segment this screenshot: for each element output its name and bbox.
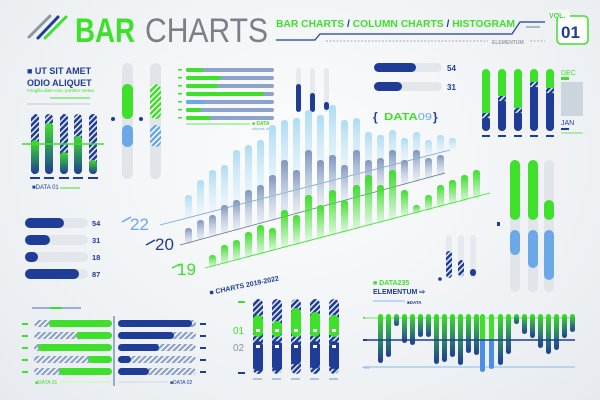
volume badge: VOL. <box>549 13 565 20</box>
bars <box>363 317 575 319</box>
subtitle <box>276 18 545 46</box>
panel: 54/31 bars <box>374 63 456 92</box>
panel: horizontal bar list <box>178 68 274 131</box>
panel: top-right stacked columns <box>482 69 583 137</box>
panel: horizontal bar list: ■ DATA <box>252 121 270 127</box>
header: title <box>29 12 268 50</box>
panel: horizontal bar list: ultrices data <box>252 126 274 131</box>
heading: ■ DATA235 <box>373 280 409 287</box>
front series 2019 <box>209 170 480 267</box>
chart: main 3D column chart 2019-2022 <box>122 105 490 297</box>
panel: 54/31/18/87 bars <box>25 218 101 279</box>
panel: twin vertical tracks <box>111 63 161 179</box>
panel: 54/31/18/87 bars: 18 <box>92 253 100 262</box>
label: DATA09: DATA 09 <box>384 112 433 123</box>
header: title: CHARTS <box>145 12 268 50</box>
panel: bottom-center stacked columns: 01 <box>233 326 245 337</box>
label: DATA09 <box>373 110 438 124</box>
mid series 2020 <box>185 150 444 244</box>
heading: ■ UT SIT AMET <box>27 66 92 76</box>
chart caption: ■ CHARTS 2019-2022 <box>209 275 280 297</box>
back series 2022 <box>185 105 456 219</box>
panel: bottom-left dual bars: ■DATA 02 <box>170 380 193 386</box>
year labels: 22 <box>130 215 149 234</box>
panel: histogram DATA235: ELEMENTUM ⇨ <box>373 289 425 296</box>
panel: top-left column chart: ODIO ALIQUET <box>27 78 92 88</box>
panel: bottom-left dual bars: ■DATA 01 <box>35 380 58 386</box>
panel: histogram DATA235 <box>362 280 575 372</box>
volume badge: 01 <box>561 23 580 42</box>
legend: ■DATA 01 <box>32 185 59 191</box>
panel: 54/31/18/87 bars: 54 <box>92 219 101 228</box>
panel: bottom-center stacked columns <box>233 299 339 380</box>
panel: right vertical tracks <box>497 160 554 292</box>
label: DATA09: } <box>433 110 438 124</box>
panel: top-left column chart <box>22 66 104 191</box>
panel: small hatched columns <box>438 235 476 281</box>
volume badge <box>548 10 588 44</box>
panel: bottom-left dual bars <box>22 307 206 386</box>
panel: histogram DATA235: ■DATA <box>407 300 422 305</box>
panel: histogram DATA235: ■ <box>363 316 365 320</box>
icon: slashes <box>29 16 66 38</box>
chart: main 3D column chart 2019-2022: 20 <box>155 235 174 254</box>
panel: bottom-center stacked columns: 02 <box>233 343 245 354</box>
panel: histogram DATA235: +005 <box>362 366 370 370</box>
subtitle: BAR CHARTS / COLUMN CHARTS / HISTOGRAM <box>276 18 515 30</box>
title text: BAR <box>75 12 135 50</box>
panel: 54/31/18/87 bars: 87 <box>92 270 100 279</box>
chart: main 3D column chart 2019-2022: 19 <box>177 260 196 279</box>
panel: top-left column chart: Fringilla diam non, porttitor metus. <box>27 88 95 93</box>
panel: small navy column chart <box>296 68 329 112</box>
panel: 54/31/18/87 bars: 31 <box>92 236 100 245</box>
bars <box>22 114 104 179</box>
panel: 54/31 bars: 31 <box>447 83 456 92</box>
labels DEC/JAN: DEC <box>561 70 576 77</box>
label: DATA09: { <box>373 110 378 124</box>
panel: top-right stacked columns: JAN <box>561 120 574 127</box>
panel: 54/31 bars: 54 <box>447 64 456 73</box>
subtitle: ELEMENTUM <box>492 40 524 46</box>
